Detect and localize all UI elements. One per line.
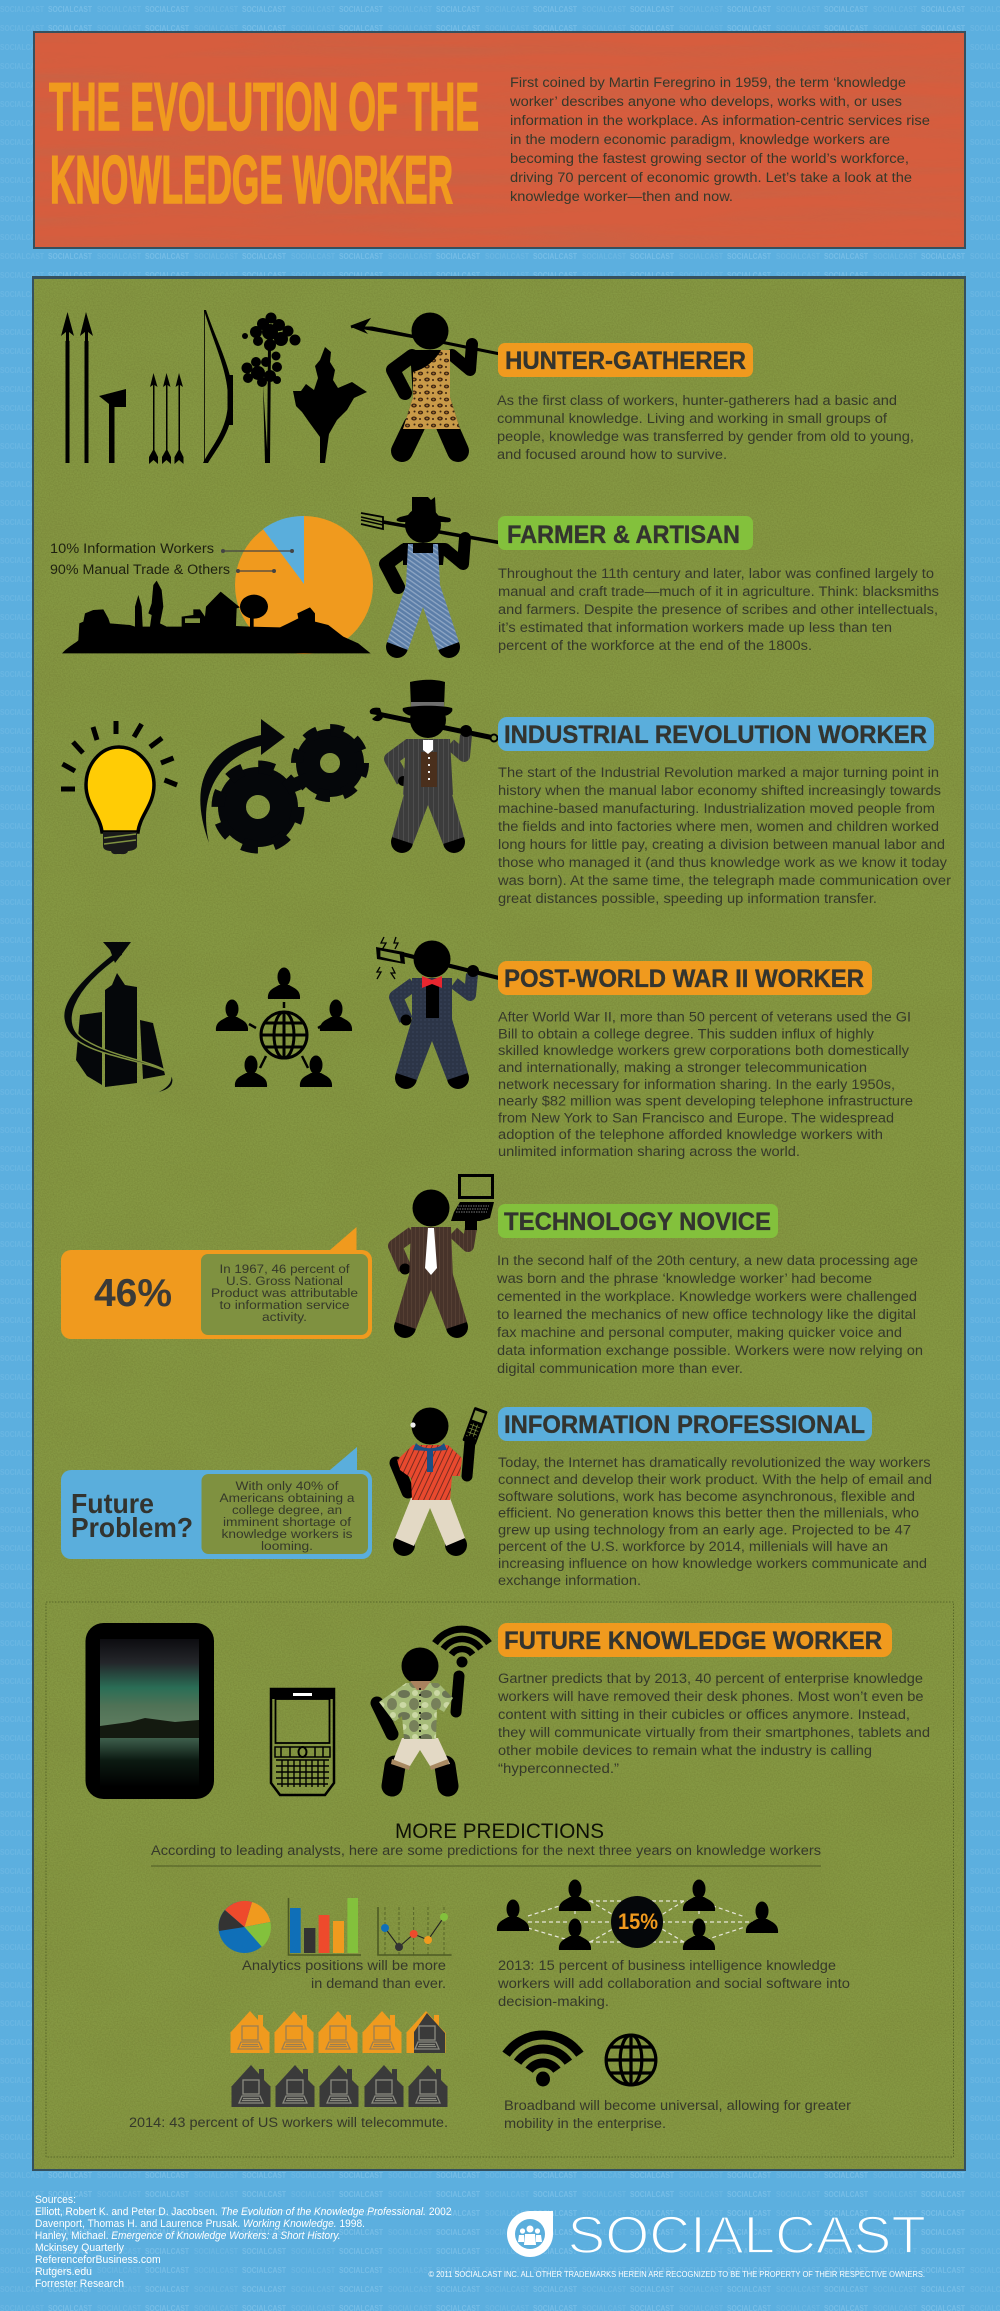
text: future knowledge worker: other mobile devices to remain what the industry is calling bbox=[498, 1743, 872, 1758]
panel: future dotted frame bbox=[46, 1602, 954, 2157]
necktie bbox=[425, 1228, 437, 1275]
chart: workforce pie bbox=[50, 516, 373, 654]
text: future knowledge worker: “hyperconnected.” bbox=[498, 1761, 619, 1776]
text: business intelligence: 2013: 15 percent of business intelligence knowledge bbox=[498, 1958, 836, 1973]
icon: hunter tools bbox=[61, 310, 367, 464]
text: technology novice: was born and the phrase ‘knowledge worker’ had become bbox=[496, 1271, 872, 1286]
callout: 46 percent: 46% bbox=[94, 1272, 172, 1315]
callout: future problem: Problem? bbox=[71, 1512, 193, 1543]
text: analytics: Analytics positions will be more bbox=[242, 1958, 446, 1973]
icon: farm landscape bbox=[62, 581, 371, 653]
vest and shirt bbox=[421, 740, 437, 787]
text: industrial: great distances possible, speeding up information transfer. bbox=[498, 891, 877, 906]
panel: header bbox=[33, 31, 966, 249]
text: industrial: long hours for little pay, creating a division between manual labor and bbox=[498, 837, 945, 852]
text: information professional: grew up using technology from an early age. Projected to be 47 bbox=[498, 1522, 911, 1538]
icon: light bulb bbox=[61, 721, 177, 854]
text: future knowledge worker: content with sitting in their cubicles or offices anymore. Instead, bbox=[498, 1707, 910, 1722]
text: analytics: in demand than ever. bbox=[311, 1976, 446, 1991]
text: information professional: software solutions, work has become asynchronous, flexible and bbox=[498, 1489, 915, 1504]
callout: future problem: Future bbox=[71, 1488, 154, 1519]
text: technology novice: In the second half of the 20th century, a new data processing age bbox=[497, 1253, 918, 1268]
text: industrial: was born). At the same time, the telegraph made communication over bbox=[497, 873, 952, 888]
text: industrial: history when the manual labor economy shifted increasingly towards bbox=[498, 783, 941, 798]
text: future knowledge worker bbox=[497, 1671, 930, 1776]
text: hunter-gatherer: people, knowledge was transferred by gender from old to young, bbox=[497, 429, 914, 444]
icon: wrench bbox=[370, 708, 498, 742]
figure: technology novice bbox=[394, 1176, 494, 1338]
text: industrial: the fields and into factories where men, women and children worked bbox=[498, 819, 939, 834]
text: post-war: unlimited information sharing across the world. bbox=[498, 1144, 800, 1159]
text: post-war: and internationally, making a stronger telecommunication bbox=[498, 1060, 867, 1075]
icon: smartphone bbox=[462, 1407, 488, 1445]
title: KNOWLEDGE WORKER bbox=[50, 142, 453, 218]
callout text: activity. bbox=[262, 1310, 307, 1324]
text: analytics bbox=[242, 1958, 446, 1991]
text: introduction: driving 70 percent of economic growth. Let’s take a look at the bbox=[510, 170, 912, 185]
icon: telecommuting houses bbox=[230, 2011, 448, 2107]
text: sources: Davenport, Thomas H. and Laurence Prusak. Working Knowledge. 1998. bbox=[35, 2218, 365, 2230]
text: farmer bbox=[498, 566, 939, 653]
text: sources: Hanley, Michael. Emergence of Knowledge Workers: a Short History. bbox=[35, 2230, 340, 2242]
legend: pie labels: 10% Information Workers bbox=[50, 541, 214, 556]
text: hunter-gatherer: communal knowledge. Living and working in small groups of bbox=[497, 411, 887, 426]
callout text: Product was attributable bbox=[211, 1286, 358, 1300]
callout text bbox=[220, 1479, 355, 1553]
figure: hunter-gatherer bbox=[351, 312, 500, 451]
icon: spear bbox=[351, 321, 500, 354]
text: information professional bbox=[498, 1455, 932, 1588]
chart: small line bbox=[378, 1907, 452, 1955]
icon: collaboration network bbox=[497, 1880, 778, 1950]
text: post-war: nearly $82 million was spent developing telephone infrastructure bbox=[498, 1094, 913, 1108]
text: introduction: worker’ describes anyone who develops, works with, or uses bbox=[509, 94, 902, 109]
icon: people around globe bbox=[216, 968, 352, 1087]
text: sources bbox=[35, 2194, 452, 2290]
icon: top hat bbox=[403, 680, 452, 716]
text: post-war: skilled knowledge workers grew corporations both domestically bbox=[498, 1043, 909, 1058]
text: technology novice: fax machine and personal computer, making quicker voice and bbox=[497, 1325, 902, 1340]
heading: technology novice: TECHNOLOGY NOVICE bbox=[504, 1209, 771, 1236]
title: THE EVOLUTION OF THE bbox=[49, 69, 479, 145]
text: sources: Mckinsey Quarterly bbox=[35, 2242, 124, 2254]
heading: hunter-gatherer: HUNTER-GATHERER bbox=[505, 348, 746, 375]
text: hunter-gatherer: As the first class of workers, hunter-gatherers had a basic and bbox=[497, 393, 897, 408]
logo: socialcast: SOCIALCAST bbox=[568, 2206, 926, 2265]
text: industrial: The start of the Industrial Revolution marked a major turning point in bbox=[498, 765, 939, 780]
text: broadband bbox=[504, 2098, 852, 2131]
logo: socialcast: © 2011 SOCIALCAST INC. ALL OTHER TRADEMARKS HEREIN ARE RECOGNIZED TO BE THE PROPERTY OF THEIR RESPECTIVE OWNERS. bbox=[428, 2269, 925, 2279]
text: sources: Sources: bbox=[35, 2194, 76, 2206]
text: introduction bbox=[509, 75, 930, 204]
icon: globe bbox=[606, 2035, 656, 2085]
heading: more predictions bbox=[151, 1820, 821, 1866]
text: broadband: mobility in the enterprise. bbox=[504, 2116, 666, 2131]
callout text: imminent shortage of bbox=[223, 1515, 352, 1529]
text: business intelligence: decision-making. bbox=[498, 1994, 609, 2009]
text: technology novice: cemented in the workplace. Knowledge workers were challenged bbox=[497, 1289, 917, 1304]
icon: pitchfork bbox=[361, 513, 502, 543]
text: industrial: those who managed it (and thus knowledge work as we know it today bbox=[498, 855, 947, 870]
text: information professional: connect and develop their work product. With the help of email and bbox=[498, 1472, 932, 1487]
icon: wifi bbox=[506, 2035, 580, 2086]
icon: arrow over gears bbox=[200, 719, 363, 847]
text: farmer: manual and craft trade—much of it in agriculture. Think: blacksmiths bbox=[498, 584, 939, 599]
text: sources: ReferenceforBusiness.com bbox=[35, 2254, 161, 2266]
chart: small pie bbox=[218, 1901, 271, 1953]
icon: telephone on stick bbox=[376, 937, 499, 979]
icon: blackberry phone bbox=[271, 1689, 334, 1795]
text: introduction: in the modern economic paradigm, knowledge workers are bbox=[510, 132, 890, 147]
text: business intelligence: workers will add collaboration and social software into bbox=[497, 1976, 850, 1991]
text: introduction: information in the workplace. As information-centric services rise bbox=[510, 113, 930, 128]
text: future knowledge worker: workers will have removed their desk phones. Most won’t even be bbox=[497, 1689, 924, 1704]
text: information professional: increasing influence on how knowledge workers communicate and bbox=[498, 1556, 927, 1571]
text: introduction: becoming the fastest growing sector of the world’s workforce, bbox=[510, 151, 909, 166]
icon: wifi on figure bbox=[435, 1629, 489, 1668]
text: information professional: percent of the U.S. workforce by 2014, millenials will have an bbox=[498, 1539, 888, 1554]
chart: small bars bbox=[288, 1898, 361, 1955]
text: hunter-gatherer bbox=[497, 393, 914, 462]
logo: socialcast bbox=[428, 2206, 926, 2279]
text: information professional: exchange information. bbox=[498, 1573, 641, 1588]
figure: farmer bbox=[361, 497, 502, 658]
title bbox=[49, 69, 479, 218]
text: sources: Rutgers.edu bbox=[35, 2266, 92, 2278]
text: technology novice bbox=[496, 1253, 923, 1376]
text: broadband: Broadband will become universal, allowing for greater bbox=[504, 2098, 852, 2113]
text: post-war bbox=[498, 1010, 913, 1159]
icon: laptop bbox=[451, 1176, 494, 1221]
legend: pie labels bbox=[50, 541, 294, 577]
text: farmer: it’s estimated that information workers made up less than ten bbox=[498, 620, 892, 635]
collar bbox=[413, 1443, 447, 1472]
icon: skyscraper with swoosh bbox=[64, 942, 173, 1094]
heading: more predictions: According to leading analysts, here are some predictions for the next three years on knowledge workers bbox=[151, 1843, 821, 1858]
text: technology novice: data information exchange possible. Workers were now relying on bbox=[497, 1343, 923, 1358]
text: hunter-gatherer: and focused around how to survive. bbox=[497, 447, 727, 462]
figure: future knowledge worker bbox=[377, 1629, 489, 1786]
text: future knowledge worker: Gartner predicts that by 2013, 40 percent of enterprise knowledge bbox=[498, 1671, 923, 1686]
heading: post-war: POST-WORLD WAR II WORKER bbox=[504, 966, 864, 993]
legend: pie labels: 90% Manual Trade & Others bbox=[50, 562, 230, 577]
text: telecommute: 2014: 43 percent of US workers will telecommute. bbox=[129, 2115, 448, 2130]
callout text: In 1967, 46 percent of bbox=[220, 1262, 350, 1276]
callout text bbox=[211, 1262, 358, 1324]
figure: industrial worker bbox=[370, 680, 498, 853]
icon: smartphone large bbox=[86, 1623, 214, 1799]
callout text: knowledge workers is bbox=[222, 1527, 352, 1541]
callout text: college degree, an bbox=[232, 1503, 342, 1517]
callout text: to information service bbox=[220, 1298, 350, 1312]
figure: post-war worker bbox=[376, 937, 499, 1089]
text: technology novice: digital communication more than ever. bbox=[497, 1361, 743, 1376]
text: sources: Elliott, Robert K. and Peter D. Jacobsen. The Evolution of the Knowledge Professional. 2002 bbox=[35, 2206, 452, 2218]
text: post-war: network necessary for information sharing. In the early 1950s, bbox=[498, 1077, 895, 1092]
heading: future knowledge worker: FUTURE KNOWLEDGE WORKER bbox=[504, 1628, 882, 1655]
figure: information professional bbox=[393, 1407, 488, 1556]
callout text: looming. bbox=[261, 1539, 313, 1553]
icon: collaboration network: 15% bbox=[618, 1909, 658, 1934]
icon: farmer hat bbox=[397, 497, 451, 522]
heading: information professional: INFORMATION PROFESSIONAL bbox=[504, 1412, 865, 1439]
text: post-war: from New York to San Francisco and Europe. The widespread bbox=[498, 1110, 894, 1125]
callout text: Americans obtaining a bbox=[220, 1491, 355, 1505]
shirt and bow tie bbox=[422, 976, 442, 1018]
text: introduction: knowledge worker—then and now. bbox=[510, 189, 733, 204]
callout: 46 percent bbox=[61, 1227, 372, 1339]
callout text: With only 40% of bbox=[236, 1479, 339, 1493]
text: farmer: Throughout the 11th century and later, labor was confined largely to bbox=[498, 566, 934, 581]
icon: logo mark bbox=[507, 2211, 553, 2257]
text: industrial: machine-based manufacturing. Industrialization moved people from bbox=[498, 801, 935, 816]
text: introduction: First coined by Martin Feregrino in 1959, the term ‘knowledge bbox=[510, 75, 906, 90]
text: post-war: adoption of the telephone afforded knowledge workers with bbox=[498, 1127, 883, 1142]
callout text: U.S. Gross National bbox=[226, 1274, 343, 1288]
text: industrial bbox=[497, 765, 952, 906]
heading: farmer: FARMER & ARTISAN bbox=[507, 522, 740, 549]
text: business intelligence bbox=[497, 1958, 850, 2009]
text: information professional: Today, the Internet has dramatically revolutionized the way workers bbox=[498, 1455, 931, 1470]
text: post-war: Bill to obtain a college degree. This sudden influx of highly bbox=[498, 1026, 874, 1041]
heading: industrial: INDUSTRIAL REVOLUTION WORKER bbox=[504, 722, 927, 749]
text: farmer: and farmers. Despite the presence of scribes and other intellectuals, bbox=[498, 602, 938, 617]
callout: future problem bbox=[61, 1447, 372, 1559]
panel: green timeline background bbox=[32, 276, 966, 2171]
heading: more predictions: MORE PREDICTIONS bbox=[395, 1820, 604, 1843]
text: farmer: percent of the workforce at the end of the 1800s. bbox=[498, 638, 812, 653]
text: sources: Forrester Research bbox=[35, 2278, 124, 2290]
text: future knowledge worker: they will communicate virtually from their smartphones, tablets and bbox=[498, 1725, 930, 1740]
text: technology novice: to learned the mechanics of new office technology like the digital bbox=[497, 1307, 916, 1322]
text: information professional: efficient. No generation knows this better then the millenials, who bbox=[498, 1506, 919, 1520]
text: post-war: After World War II, more than 50 percent of veterans used the GI bbox=[498, 1010, 911, 1024]
